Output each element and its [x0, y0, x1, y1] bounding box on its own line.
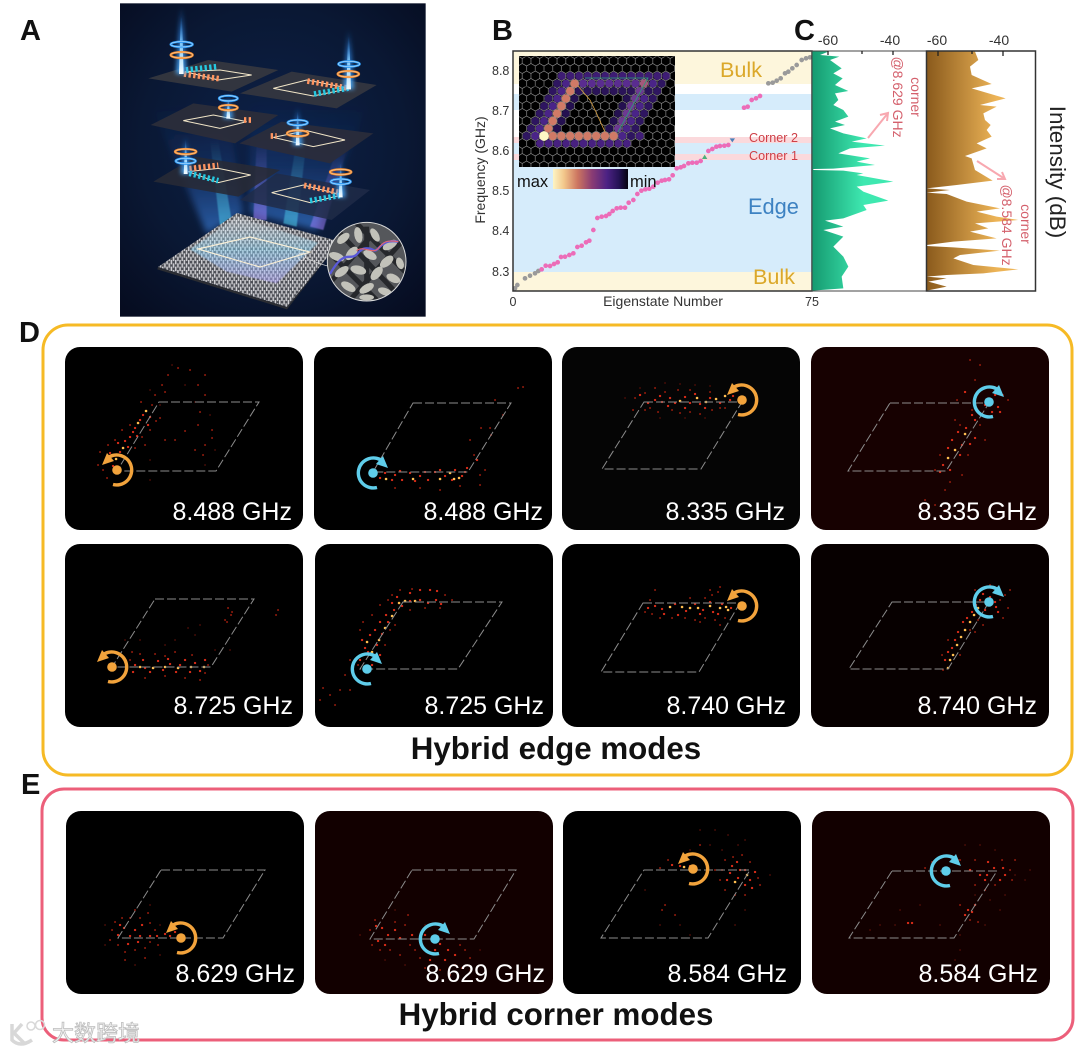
top axis labels: -40 [880, 32, 900, 48]
y axis labels: 8.6 [492, 144, 509, 158]
panel E: hybrid corner modes [42, 789, 1073, 1040]
heading: Hybrid edge modes [411, 731, 701, 766]
colour bar [517, 169, 657, 191]
y axis labels: 8.8 [492, 64, 509, 78]
metasurface base [157, 213, 340, 309]
green spectrum [812, 51, 893, 291]
top axis labels: -40 [989, 32, 1009, 48]
tile 8.740 orange: 8.740 GHz [666, 692, 786, 720]
tile 8.740 blue: 8.740 GHz [917, 692, 1037, 720]
x axis labels: 0 [510, 295, 517, 309]
band labels: Corner 1 [749, 149, 798, 163]
tile 8.629 orange [66, 811, 304, 994]
heading: Hybrid corner modes [399, 997, 713, 1032]
panel B: eigenfrequency chart [472, 51, 819, 309]
colour bar: min [630, 173, 657, 191]
tile 8.488 blue: 8.488 GHz [423, 498, 543, 526]
tile 8.725 blue: 8.725 GHz [424, 692, 544, 720]
tile 8.629 orange: 8.629 GHz [175, 960, 295, 988]
stacked planes [148, 60, 377, 220]
orange spectrum [927, 51, 1018, 291]
annotation 8.584 [999, 184, 1034, 266]
annotation 8.584: @8.584 GHz [999, 184, 1015, 266]
top axis labels: -60 [927, 32, 947, 48]
y axis labels: 8.3 [492, 265, 509, 279]
panel label B: B [492, 15, 513, 47]
eigenstate dots [515, 57, 810, 288]
arrow: corner 8.584 [977, 161, 1005, 179]
tile 8.584 blue [812, 811, 1050, 994]
spectrum bands [513, 51, 812, 291]
magnifier inset [327, 222, 410, 301]
x axis labels [510, 293, 819, 309]
light fan from base [153, 100, 367, 233]
annotation 8.584: corner [1018, 204, 1034, 244]
watermark [12, 1016, 140, 1048]
x axis labels: Eigenstate Number [603, 293, 723, 309]
band labels [720, 57, 799, 289]
tile 8.488 orange: 8.488 GHz [172, 498, 292, 526]
panel label A: A [20, 15, 41, 47]
colour bar: max [517, 173, 549, 191]
x axis labels: 75 [805, 295, 819, 309]
vertical beams [176, 7, 354, 197]
tile 8.629 blue: 8.629 GHz [425, 960, 545, 988]
band labels: Bulk [753, 264, 795, 289]
panel label D: D [19, 317, 40, 349]
tile 8.335 orange: 8.335 GHz [665, 498, 785, 526]
tile 8.725 blue [315, 544, 553, 727]
tile 8.740 orange [562, 544, 800, 727]
annotation 8.629: @8.629 GHz [890, 56, 906, 138]
y axis labels: 8.7 [492, 104, 509, 118]
annotation 8.629: corner [908, 77, 924, 117]
top axis labels [818, 32, 1009, 48]
tile 8.584 orange [563, 811, 801, 994]
panel label E: E [21, 769, 40, 801]
top axis labels: -60 [818, 32, 838, 48]
annotation 8.629 [890, 56, 924, 138]
tile 8.488 blue [314, 347, 552, 530]
inset: mode map [519, 56, 675, 167]
tile 8.335 blue [811, 347, 1049, 530]
tile 8.725 orange [65, 544, 303, 727]
spin rings [171, 42, 360, 184]
tile 8.740 blue [811, 544, 1049, 727]
band labels: Edge [748, 194, 799, 219]
tile 8.584 blue: 8.584 GHz [918, 960, 1038, 988]
tile 8.725 orange: 8.725 GHz [173, 692, 293, 720]
y axis labels [472, 64, 509, 279]
y axis labels: 8.4 [492, 224, 509, 238]
axis title: Intensity (dB) [1045, 106, 1070, 238]
arrow: corner 8.629 [868, 113, 888, 138]
y axis labels: 8.5 [492, 184, 509, 198]
tile 8.629 blue [315, 811, 553, 994]
mode outlines [183, 70, 350, 203]
tile 8.488 orange [65, 347, 303, 530]
tile 8.584 orange: 8.584 GHz [667, 960, 787, 988]
plot frames [812, 51, 1036, 291]
panel C: intensity spectra [812, 32, 1070, 291]
plot frame [513, 51, 812, 291]
tile 8.335 blue: 8.335 GHz [917, 498, 1037, 526]
y axis labels: Frequency (GHz) [472, 116, 488, 224]
field bars [184, 67, 349, 201]
band labels: Corner 2 [749, 131, 798, 145]
band labels: Bulk [720, 57, 762, 82]
panel label C: C [794, 15, 815, 47]
tile 8.335 orange [562, 347, 800, 530]
watermark: 大数跨境 [52, 1016, 140, 1048]
panel D: hybrid edge modes [43, 325, 1072, 775]
panel A: layered metasurface illustration [120, 3, 426, 317]
